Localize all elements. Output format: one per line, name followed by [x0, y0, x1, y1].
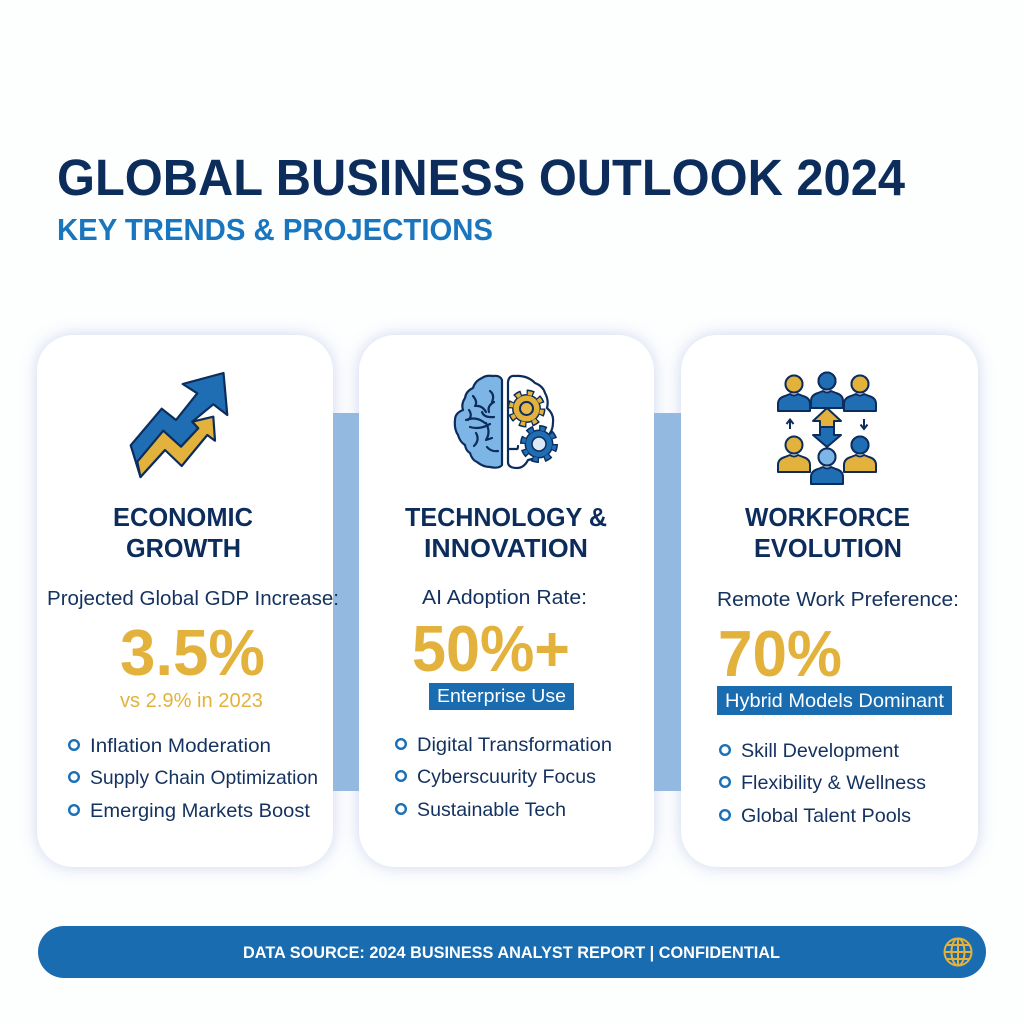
bullet list: Global Talent Pools [741, 805, 911, 827]
bullet list: Cyberscuurity Focus [417, 766, 596, 788]
title: GLOBAL BUSINESS OUTLOOK 2024 [57, 149, 906, 206]
tag: enterprise use [429, 683, 574, 710]
comparison note: vs 2.9% in 2023 [120, 690, 263, 712]
bullet list: Emerging Markets Boost [90, 800, 311, 822]
bullet list [396, 734, 612, 821]
tag: hybrid models: Hybrid Models Dominant [725, 690, 945, 712]
heading: economic growth: ECONOMIC [113, 502, 253, 532]
footer bar [38, 926, 986, 978]
panel: workforce evolution [681, 335, 978, 867]
icon: brain and gears [455, 376, 554, 468]
connecting band: right gap [654, 413, 681, 791]
gold gear [511, 393, 542, 424]
heading: technology and innovation [405, 502, 607, 563]
blue gear [524, 428, 554, 460]
heading: technology and innovation: TECHNOLOGY & [405, 502, 607, 532]
icon: globe [944, 938, 972, 966]
connecting band: left gap [333, 413, 359, 791]
bullet list: Flexibility & Wellness [741, 772, 926, 794]
tag: enterprise use: Enterprise Use [437, 685, 566, 706]
label: projected GDP: Projected Global GDP Increase: [47, 587, 339, 610]
stat: 50%+: 50%+ [412, 612, 570, 685]
label: AI adoption: AI Adoption Rate: [422, 586, 587, 609]
tag: hybrid models [717, 686, 952, 715]
heading: workforce evolution: WORKFORCE [745, 502, 910, 532]
icon: rising arrows [131, 373, 227, 477]
heading: technology and innovation: INNOVATION [424, 533, 588, 563]
bullet list [720, 740, 926, 827]
bullet list: Sustainable Tech [417, 799, 566, 821]
heading: workforce evolution: EVOLUTION [754, 533, 902, 563]
icon: people exchange [778, 372, 876, 484]
bullet list: Inflation Moderation [90, 735, 271, 757]
stat: 3.5%: 3.5% [120, 616, 265, 689]
bullet list: Digital Transformation [417, 734, 612, 756]
subtitle: KEY TRENDS & PROJECTIONS [57, 212, 493, 247]
panel: technology and innovation [359, 335, 654, 867]
bullet list [69, 735, 318, 822]
bullet list: Supply Chain Optimization [90, 767, 318, 789]
label: remote work: Remote Work Preference: [717, 588, 959, 611]
heading: workforce evolution [745, 502, 910, 563]
heading: economic growth: GROWTH [126, 533, 241, 563]
heading: economic growth [113, 502, 253, 563]
stat: 70%: 70% [718, 617, 842, 690]
bullet list: Skill Development [741, 740, 900, 762]
panel: economic growth [37, 335, 333, 867]
footer text: DATA SOURCE: 2024 BUSINESS ANALYST REPORT | CONFIDENTIAL [243, 943, 780, 962]
